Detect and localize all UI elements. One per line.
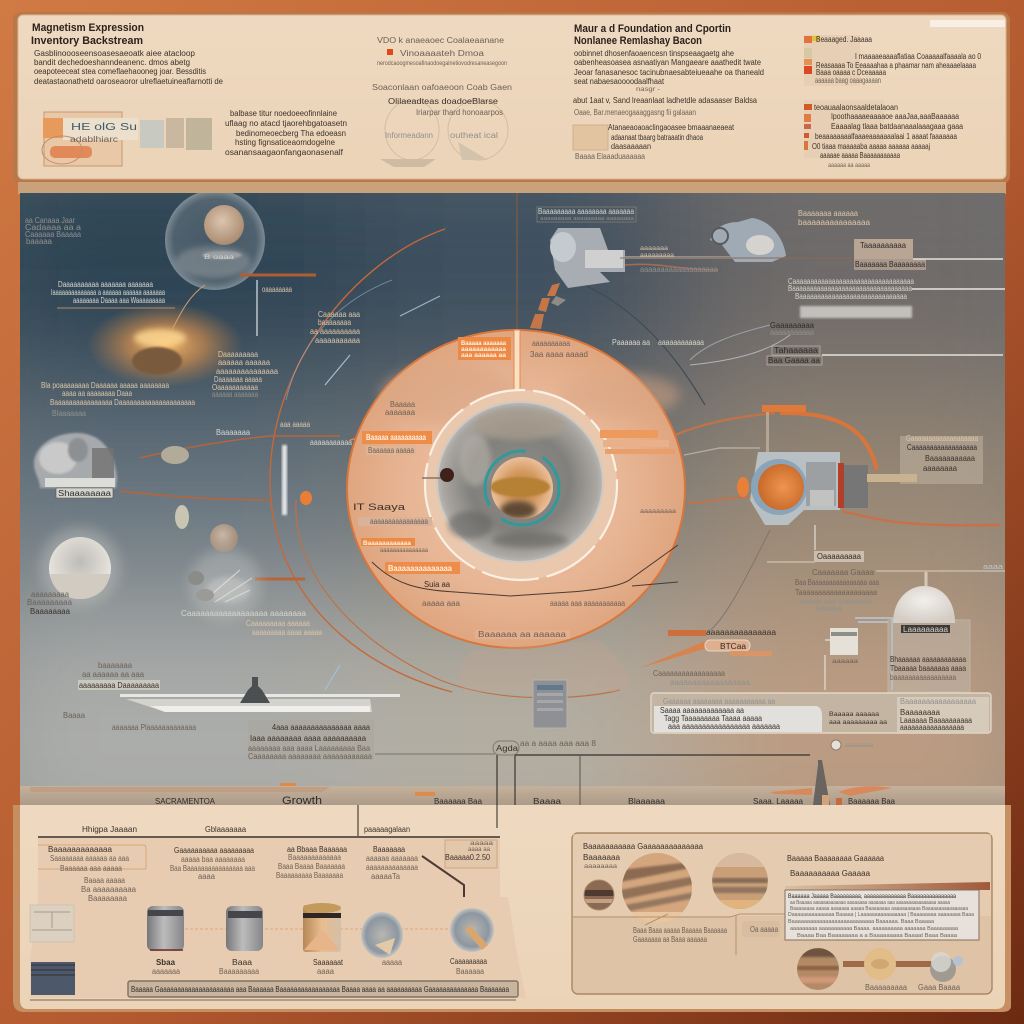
connector lines and height label: aa a aaaa aaa aaa 8 bbox=[520, 739, 597, 748]
icon: medium banded planet bbox=[712, 853, 768, 909]
text: left upper annotations: aaaaaa aaaaaaa bbox=[212, 390, 258, 399]
text block: top right heading and body: Oaae, Bar.menaeogaaaggasng fii galaaan bbox=[574, 108, 696, 117]
bottom strip of diagram with scale labels: SACRAMENTOA bbox=[155, 797, 216, 806]
text: left upper annotations: aaaa aa aaaaaaaa Daaa bbox=[62, 389, 132, 398]
labels inside disc: Baaaaaa aa aaaaaa bbox=[478, 630, 567, 639]
legend: upper colour swatches: Baaa oaaaa c Dceaaaaa bbox=[816, 68, 886, 77]
text: planet captions: Baaa Baaa aaaaa Baaaaa Baaaaaa bbox=[633, 926, 727, 935]
connector lines and height label: Agda bbox=[496, 744, 519, 753]
labels inside disc: IT Saaya bbox=[353, 502, 405, 512]
icon: small grey sphere bbox=[210, 524, 238, 552]
text: panel heading: Baaaaa Baaaaaaaa Gaaaaaa bbox=[787, 854, 885, 863]
diagram: faint lens sketch with captions: VDO k anaeaoec Coalaeaanane bbox=[377, 36, 505, 45]
icon: white dome on stand bbox=[855, 572, 970, 692]
icon: small satellite bbox=[175, 505, 189, 529]
icon: small asteroid bbox=[161, 446, 189, 464]
text: left upper annotations: Caaaaaa aaa bbox=[318, 310, 360, 319]
text: left upper annotations: aaaaaaaa Daaaa aaa Waaaaaaaaa bbox=[73, 296, 165, 305]
bottom strip of diagram with scale labels bbox=[20, 760, 1005, 807]
panel: lower right readout bar: Baaaaaaaa bbox=[900, 708, 941, 717]
icon: planet core with teal ring bbox=[485, 451, 559, 525]
text: left upper annotations: Daaaaaaaaa bbox=[218, 350, 258, 359]
text: left upper annotations: oaaaaaaaa bbox=[262, 285, 292, 294]
text: panel heading bbox=[583, 842, 885, 878]
icon: dark probe dot bbox=[422, 468, 454, 482]
text: item captions: Caaaaaaaaa bbox=[450, 957, 487, 966]
text: left upper annotations: Daaaaaaa aaaaa bbox=[214, 375, 262, 384]
icon: pale sphere bbox=[40, 527, 120, 607]
bottom strip of diagram with scale labels: Blaaaaaa bbox=[628, 797, 666, 806]
legend: upper colour swatches: I maaaaeaaaaflatiaa Coaaaaalfaaaala ao 0 bbox=[855, 52, 981, 61]
text: upper right annotations: Taaaaaaaaaa bbox=[860, 241, 907, 250]
text: item captions: aaaa bbox=[317, 967, 335, 976]
text: step descriptions: Baaaaaa aaa aaaaa bbox=[60, 864, 122, 873]
labels inside disc bbox=[353, 337, 677, 639]
text: left upper annotations: aaaaaaaaaaa bbox=[315, 336, 360, 345]
text: lower left annotations: Caaaaaaaaa aaaaaa bbox=[246, 619, 310, 628]
text: upper right annotations: Caaaaaaaaaaaaaaaaaaaaaaaaaaaaaaaaaa bbox=[788, 277, 914, 286]
white dashed ring bbox=[425, 390, 617, 580]
text: step descriptions: Baaaaaaaaa Baaaaaaa bbox=[276, 871, 343, 880]
text block: top right heading and body: daasaaaaan bbox=[611, 142, 651, 151]
panel: lower right readout bar: Baaaaaaaaaaaaaaaaa bbox=[900, 697, 977, 706]
text: upper right annotations: Paaaaaa aa bbox=[612, 338, 650, 347]
text block: top left heading: deatastaonathetd oaroseaoror ulreflaetuineaflarnotti de bbox=[34, 77, 224, 86]
text: upper right annotations: Baaaaaaaaaaaaaaaaaaaaaaaaaaaaaaaaaa bbox=[788, 284, 912, 293]
icon: grey can one bbox=[147, 906, 184, 951]
labels inside disc: aaaaaaaaaaaaaaa bbox=[380, 548, 429, 554]
text: left upper annotations: aaa aaaaa bbox=[280, 420, 310, 429]
text: item captions: Baaaaaaaaa bbox=[219, 967, 259, 976]
text block: top centre paragraph: balbase titur noedoeeofinnlaine bbox=[230, 109, 338, 118]
text: upper right annotations: aaaaaaa bbox=[640, 246, 669, 252]
panel: planet comparison bbox=[572, 833, 992, 994]
label: orange tags: aaaaaaaaaaaaaaa bbox=[706, 628, 777, 637]
text block: lower centre note: Iaaa aaaaaaaa aaaa aaaaaaaaaa bbox=[250, 734, 367, 743]
text block: top centre paragraph: hsting fignsaticeaomdogelne bbox=[235, 138, 336, 147]
text: panel heading: Baaaaaaaaaaa Gaaaaaaaaaaaaaa bbox=[583, 842, 704, 851]
icon: glass bubble with moon bbox=[165, 190, 316, 290]
bottom strip of diagram with scale labels: Saaa. Laaaaa bbox=[753, 797, 804, 806]
text block: right centre note: Baa Baaaaaaaaaaaaaaaa aaa bbox=[795, 578, 879, 587]
icon: sample image cluster: HE olG Su bbox=[71, 122, 137, 133]
text block: top centre paragraph: osanansaagaonfangaonasenalf bbox=[225, 148, 344, 157]
icon: glass lens bbox=[437, 402, 603, 562]
legend: upper colour swatches: Reasaaaa To Eeaaaahaa a phaamar nam aheaaaelaaaa bbox=[816, 61, 976, 70]
text: lower left annotations: aa aaaaaa aa aaa bbox=[82, 670, 145, 679]
text: upper right annotations: Baa Gaaaa aa bbox=[768, 356, 821, 365]
diagram: faint lens sketch with captions: Informeadann bbox=[385, 131, 433, 140]
text: left upper annotations: Oaaaaaaaaaaa bbox=[212, 383, 258, 392]
central disc with lens bbox=[347, 330, 685, 692]
legend: lower colour swatches: Ipoothaaaaeaaaaoe aaaJaa,aaaBaaaaaa bbox=[831, 112, 959, 121]
text block: white note box bbox=[785, 890, 979, 940]
text block: right centre note bbox=[767, 551, 1005, 613]
text block: right centre note: Taaaaaaaaaaaaaaaaaaaa bbox=[795, 588, 877, 597]
text block: top left heading: Magnetism Expression bbox=[32, 22, 144, 34]
text: step descriptions: Saaaaaaaa aaaaaa aa aaa bbox=[50, 854, 129, 863]
panel: lower right readout bar: aaaaaaa bbox=[845, 743, 874, 749]
text block: far right note: aaaaaaaa bbox=[923, 464, 958, 473]
icon: glass sphere one bbox=[361, 912, 403, 958]
labels inside disc: aaaaaaaaaaaaaaaa bbox=[370, 517, 428, 526]
icon: top centre device bbox=[550, 228, 740, 288]
legend: upper colour swatches: aaaaaa baag oaaagaaaan bbox=[815, 76, 881, 85]
labels inside disc: aaaaaaaaaaaa bbox=[461, 347, 507, 353]
text block: top right heading and body: adaanaat tbaarg batraaatin dhaoa bbox=[611, 133, 703, 142]
vertical axis line bbox=[516, 193, 518, 330]
panel: lower right readout bar: Laaaaaa Baaaaaaaaaa bbox=[900, 716, 972, 725]
icon: orange node bbox=[300, 491, 312, 505]
text block: top left heading: bandit dechedoeshanndeanenc. dmos abetg bbox=[34, 58, 190, 67]
text block: top right heading and body: oobinnet dhosenfaoaencesn tinspseaagaetg ahe bbox=[574, 49, 735, 58]
labels inside disc: Baaaaa aaaaaaa bbox=[461, 341, 507, 347]
labels inside disc: Baaaaaaaaaaaaaa bbox=[388, 564, 453, 573]
text block: lower centre note: 4aaa aaaaaaaaaaaaaaa aaaa bbox=[272, 723, 371, 732]
panel: lower right readout bar bbox=[651, 693, 991, 750]
legend: upper colour swatches bbox=[804, 35, 981, 86]
text: upper right annotations: Baaaaaaa aaaaaa bbox=[798, 209, 858, 218]
labels inside disc: aaaaa aaa bbox=[422, 599, 461, 608]
text: left upper annotations: aaaaaaaaaaaaaaa bbox=[216, 367, 279, 376]
icon: glass sphere two bbox=[450, 908, 494, 952]
text block: top left heading bbox=[31, 22, 224, 86]
text block: top right heading and body: Nonlanee Remlashay Bacon bbox=[574, 35, 702, 47]
text: item captions: Baaa bbox=[232, 958, 253, 967]
text block: top right heading and body: Jeoar fanasanesoc tacinubnaesabteiueaahe oa thaneald bbox=[574, 68, 764, 77]
text: left upper annotations: baaaaaaaa bbox=[318, 318, 351, 327]
chart: orbit arcs bbox=[270, 229, 790, 698]
text: lower left annotations: Baaaaaaaa bbox=[30, 607, 71, 616]
icon: white dome on stand: Bhaaaaaa aaaaaaaaaaaa bbox=[890, 655, 966, 664]
labels inside disc: Suia aa bbox=[424, 580, 451, 589]
legend: lower colour swatches: aaaaaa aa aaaaa bbox=[828, 163, 871, 169]
panel: process steps bbox=[30, 805, 526, 1000]
text block: top right heading and body: Maur a d Foundation and Cportin bbox=[574, 23, 731, 35]
text: step descriptions: Gaaaaaaaaaa aaaaaaaaa bbox=[174, 846, 254, 855]
text: item captions: Sbaa bbox=[156, 958, 176, 967]
text: left upper annotations: Caaaaaa Baaaaa bbox=[25, 230, 81, 239]
text: left upper annotations: aaaaaaaaaaa bbox=[310, 438, 352, 447]
text: upper right annotations: aaaaaaaaa aaaaaaaaa aaaaaaaa bbox=[540, 216, 634, 222]
callout: top right note with pointer: aaaaa bbox=[470, 841, 494, 847]
arrow: dotted process connector bbox=[185, 928, 450, 930]
text block: white note box: aa Baaaaa aaaaaaaaaaaaa aaaaaaaa aaaaaaa aaa aaaaaaaaaaaaaaaa aaaaa bbox=[790, 900, 950, 906]
text: step descriptions: Baaaaaaaaaaaaa bbox=[288, 853, 341, 862]
icon: glowing rock bbox=[87, 285, 243, 387]
text: item captions bbox=[152, 957, 487, 976]
callout: top right note with pointer bbox=[422, 840, 497, 897]
text: step descriptions: Ba aaaaaaaaaa bbox=[81, 885, 137, 894]
labels inside disc: aaaaa aaa aaaaaaaaaaa bbox=[550, 599, 625, 608]
icon: planet chain bbox=[797, 948, 963, 992]
text block: top right heading and body: abut 1aat v, Sand lreaanlaat ladhetdle adasaaser Baldsa bbox=[573, 96, 757, 105]
icon: helmet device bbox=[34, 433, 117, 498]
icon: top right device bbox=[710, 218, 786, 262]
bright vertical streak bbox=[282, 445, 287, 515]
text: left upper annotations: aa aaaaaaaaaa bbox=[310, 327, 360, 336]
text: lower left annotations: Baaaaaaaaa bbox=[27, 598, 73, 607]
text block: top right heading and body: seat nabaesaoooodaalfhaat bbox=[574, 77, 665, 86]
text: left upper annotations: Cadaaaa aa a bbox=[25, 223, 82, 232]
legend: lower colour swatches: Eaaaalag tlaaa batdaanaaalaaagaaa gaaa bbox=[831, 122, 963, 131]
icon: right camera device with orange lens bbox=[675, 405, 1000, 550]
text: lower left annotations: Caaaaaaaaaaaaaaaaaa aaaaaaaa bbox=[181, 609, 307, 618]
text block: white note box: Baaaaaa Jaaaaa Baaaaaaaaa, aaaaaaaaaaaaaa Baaaaaaaaaaaaaaa bbox=[788, 894, 957, 900]
icon: flat platform with tower bbox=[120, 677, 400, 712]
text block: lower centre note: Caaaaaaaa aaaaaaaa aaaaaaaaaaaa bbox=[248, 752, 372, 761]
labels inside disc: aaaaaaaaa bbox=[640, 509, 677, 515]
text: step descriptions: Baaaa aaaaa bbox=[84, 876, 125, 885]
icon: white dome on stand: Tbaaaaa baaaaaaa aaaa bbox=[890, 664, 966, 673]
text: planet captions: Oa aaaaa bbox=[750, 925, 778, 934]
text: step descriptions: Baaaaaaaaaaaaa bbox=[48, 845, 113, 854]
text: lower left annotations: aaaaaaa Plaaaaaaaaaaaaa bbox=[112, 723, 196, 732]
text: upper right annotations: Gaaaaaaaaa bbox=[770, 321, 815, 330]
text block: top centre paragraph: uflaag no atacd tjaorehbgatoasetn bbox=[225, 119, 347, 128]
panel: bottom section bbox=[13, 805, 1011, 1012]
icon: sample image cluster: adablhiarc bbox=[70, 135, 118, 144]
text: step descriptions: Baaaaaaa bbox=[373, 845, 405, 854]
text: step descriptions: Baaa Baaaa Baaaaaaa bbox=[278, 862, 345, 871]
bottom strip of diagram with scale labels: Baaaaaa Baa bbox=[434, 797, 483, 806]
icon: helmet device: Shaaaaaaaa bbox=[58, 489, 112, 498]
panel: lower right readout bar: aaaaaaaaaaaaaaaaa bbox=[900, 723, 964, 732]
text: step descriptions: aaaaaa aaaaaaa bbox=[366, 854, 418, 863]
text: step descriptions: aaaaaaaaaaaaaa bbox=[366, 863, 418, 872]
text: left upper annotations: Daaaaaaaaaa aaaaaaa aaaaaaa bbox=[58, 280, 153, 289]
text: upper right annotations: Baaaaaaa Baaaaaaaa bbox=[855, 260, 925, 269]
icon: planet chain: Baaaaaaaaa bbox=[865, 983, 907, 992]
bottom strip of diagram with scale labels: Growth bbox=[282, 795, 322, 807]
callout: top right note with pointer: Baaaaa0.2.50 bbox=[445, 853, 490, 862]
icon: sample image cluster bbox=[42, 112, 212, 166]
icon: large striped planet bbox=[620, 853, 695, 924]
legend: upper colour swatches: Beaaaged. Jaaaaa bbox=[816, 35, 872, 44]
text block: right centre note: aaaaa aaa aaaaaaaa bbox=[800, 597, 873, 606]
text block: lower centre note: aaaaaaaa aaa aaaa Laaaaaaaaa Baa bbox=[248, 744, 370, 753]
text block: right centre note: Oaaaaaaaaa bbox=[817, 552, 862, 561]
text: upper right annotations: Baaaaaaaaaaaaaaaaaaaaaaaaaaaaaa bbox=[795, 292, 907, 301]
text block: top right heading and body: Atanaeaoaoaclingaoasee bmaaanaeaeat bbox=[608, 123, 735, 132]
text block: top centre paragraph bbox=[225, 109, 347, 157]
icon: sparkle debris cluster bbox=[188, 549, 261, 621]
icon: gold can bbox=[303, 903, 341, 952]
text block: top right heading and body: oabenheasoasea asnaatiyan Mangaeare aaathedit twate bbox=[574, 58, 762, 67]
text: upper right annotations: aaaaaaaaaaaaaaaaaaa bbox=[640, 265, 718, 274]
text: left upper annotations: aaaaaa aaaaaa bbox=[218, 358, 271, 367]
text: left upper annotations: Baaaaaaa bbox=[216, 428, 251, 437]
text block: right centre note: aaaaa bbox=[815, 604, 843, 613]
text block: white note box: Baaaaaaaaaaaaaaaaaaaaaaaaaaa Baaaaaa. Baaa Baaaaa bbox=[788, 919, 935, 925]
labels inside disc: aaaaaaaaaa bbox=[532, 339, 570, 348]
icon: small module box: aaaaaa bbox=[832, 659, 859, 665]
text: upper right annotations: aaaaaaaaaaa bbox=[770, 328, 814, 337]
icon: small module box bbox=[825, 628, 859, 690]
text: upper right annotations bbox=[537, 207, 1005, 365]
text: step descriptions: Baaaaaaaa bbox=[88, 894, 128, 903]
label: orange tags: BTCaa bbox=[720, 642, 747, 651]
text block: far right note bbox=[867, 434, 983, 484]
labels inside disc: aaa aaaaaa aa bbox=[461, 353, 507, 359]
text: step descriptions: aaaaaTa bbox=[371, 872, 401, 881]
text block: top left heading: Gasblinoooseensoasesaeoatk aiee atacloop bbox=[34, 49, 196, 58]
text block: white note box: Baaaaaaaa aaaaa aaaaaaa aaaaa Baaaaaaaa aaaaaaaaaaa Baaaaaaaaaaaaaaaa bbox=[790, 906, 968, 912]
text block: top left heading: oeapoteeceat stea comeflaehaooneg joar. Bessditis bbox=[34, 67, 206, 76]
labels inside disc: Baaaaa bbox=[390, 400, 415, 409]
text block: top right heading and body: nasgr - bbox=[636, 87, 660, 93]
text: item captions: aaaaaaa bbox=[152, 967, 180, 976]
text: step descriptions bbox=[48, 845, 418, 903]
text: planet captions bbox=[633, 921, 780, 944]
diagram: faint lens sketch with captions bbox=[372, 36, 512, 167]
bar above note box bbox=[785, 882, 990, 890]
text block: white note box: Baaaa Baa Baaaaaaaa a a Baaaaaaaaa Baaaat Baaa Baaaa bbox=[797, 933, 958, 939]
text block: top right heading and body: Baaaa Elaaaduaaaaaa bbox=[575, 152, 645, 161]
text block: top centre paragraph: bedinomeoecberg Tha edoeasn bbox=[236, 129, 346, 138]
text: planet captions: Gaaaaaaa aa Baaa aaaaaa bbox=[633, 935, 707, 944]
labels inside disc: Baaaaa aaaaaaaaaa bbox=[366, 433, 426, 442]
icon: small dark planet bbox=[584, 880, 614, 910]
text: left upper annotations: aa Canaaa Jaar bbox=[25, 216, 75, 225]
divider band above the main diagram bbox=[18, 182, 1006, 194]
text: panel heading: Baaaaaaaaaa Gaaaaa bbox=[790, 869, 871, 878]
icon: glass bubble with moon: B oaaa bbox=[204, 254, 235, 261]
text: lower left annotations: aaaaaaaaa aaaa aaaaa bbox=[252, 628, 322, 637]
connector lines under planets bbox=[573, 914, 785, 955]
text: upper right annotations: Baaaaaaaaa aaaaaaaa aaaaaaa bbox=[538, 207, 634, 216]
legend: lower colour swatches: O0 tiaaa maaaaaba aaaaa aaaaaa aaaaaj bbox=[812, 142, 930, 151]
legend: lower colour swatches: teoauaalaonsaaldetalaoan bbox=[814, 103, 898, 112]
label: orange tags: aaaaaaaaaaaaaaaaaa bbox=[670, 678, 751, 687]
text block: right centre note: Caaaaaaa Gaaaa bbox=[812, 568, 875, 577]
text: panel heading: aaaaaaaa bbox=[584, 864, 618, 870]
diagram: faint lens sketch with captions: Olilaeadteas doadoeBlarse bbox=[388, 97, 499, 106]
text: lower left annotations: baaaaaaa bbox=[98, 661, 133, 670]
text: lower left annotations: aaaaaaaaa bbox=[31, 590, 70, 599]
text: item captions: Baaaaaa bbox=[456, 967, 484, 976]
icon: small sample boxes bbox=[30, 905, 75, 995]
text: upper right annotations: aaaaaaaaaaaa bbox=[658, 338, 704, 347]
icon: white dome on stand: Laaaaaaaaa bbox=[903, 625, 949, 634]
text block: far right note: Gaaaaaaaaaaaaaaaaaaa bbox=[906, 434, 978, 443]
icon: grey can two bbox=[226, 906, 263, 951]
bottom strip of diagram with scale labels: Baaaa bbox=[533, 797, 562, 806]
text: step descriptions: aaaaa baa aaaaaaaa bbox=[181, 855, 245, 864]
diagram: faint lens sketch with captions: Vinoaaaateh Dmoa bbox=[400, 49, 485, 58]
wire across disc bbox=[372, 545, 678, 596]
text block: far right note: Baaaaaaaaaaa bbox=[925, 454, 976, 463]
text: step headings: Gblaaaaaaa bbox=[205, 825, 247, 834]
text: upper right annotations: baaaaaaaaaaaaaaa bbox=[798, 218, 871, 227]
icon: orange debris trail bbox=[530, 283, 566, 329]
text: left upper annotations: Bla poaaaaaaaa Daaaaaa aaaaa aaaaaaaa bbox=[41, 381, 169, 390]
callout: top right note with pointer: aaaa aa bbox=[468, 847, 491, 853]
connector lines and height label bbox=[375, 739, 810, 805]
caption bar: Baaaaa Gaaaaaaaaaaaaaaaaaaaaa aaa Baaaaaa Baaaaaaaaaaaaaaaaa Baaaa aaaa aa aaaaaaaaaa Gaaaaaaaaaaaaaa Baaaaaaa bbox=[131, 985, 509, 994]
label: orange tags bbox=[640, 628, 777, 687]
text block: white note box: aaaaaaaaa aaaaaaaaaaa Baaaa. aaaaaaaaaa aaaaaaa Baaaaaaaaa bbox=[790, 926, 959, 932]
text: step headings bbox=[82, 825, 410, 834]
diagram: faint lens sketch with captions: Soaconlaan oafoaeoon Coab Gaen bbox=[372, 83, 512, 92]
arrow: orange connectors on the left bbox=[120, 436, 362, 579]
legend: lower colour swatches bbox=[804, 100, 963, 169]
labels inside disc: Baaaaaaaaaaaa bbox=[363, 541, 412, 547]
icon: planet chain: Gaaa Baaaa bbox=[918, 983, 961, 992]
text: item captions: aaaaa bbox=[382, 958, 402, 967]
label: orange tags: Caaaaaaaaaaaaaaaaa bbox=[653, 669, 725, 678]
panel: lower right readout bar: Saaaa aaaaaaaaaaaaa aa bbox=[660, 706, 744, 715]
panel: lower right readout bar: Gaaaaaa aaaaaaaa aaaaaaaaaaa aa bbox=[663, 697, 775, 706]
caption bar bbox=[128, 981, 518, 997]
text: left upper annotations: baaaaa bbox=[26, 237, 53, 246]
text: step descriptions: aa Bbaaa Baaaaaa bbox=[287, 845, 347, 854]
line: grey connector to lower labels bbox=[708, 530, 770, 632]
text: step headings: Hhigpa Jaaaan bbox=[82, 825, 137, 834]
text: left upper annotations: Iaaaaaaaaaaaaaa a aaaaaa aaaaaa aaaaaaa bbox=[51, 288, 165, 297]
panel: main space diagram bbox=[20, 193, 1005, 805]
panel: lower right readout bar: aaa aaaaaaaaa aa bbox=[829, 720, 888, 726]
text block: lower centre note bbox=[248, 724, 372, 759]
text block: top left heading: Inventory Backstream bbox=[31, 35, 143, 47]
icon: white dome on stand: baaaaaaaaaaaaaaaaa bbox=[890, 673, 956, 682]
text: lower left annotations: aaaaaaaaa Daaaaaaaaa bbox=[79, 681, 159, 690]
labels inside disc: 3aa aaaa aaaad bbox=[530, 350, 588, 359]
text: step descriptions: Baa Baaaaaaaaaaaaaaaa aaa bbox=[170, 864, 255, 873]
text: upper right annotations: aaaaaaaaa bbox=[640, 253, 675, 259]
text: step descriptions: aaaa bbox=[198, 872, 216, 881]
text block: far right note: Caaaaaaaaaaaaaaaaaa bbox=[907, 443, 977, 452]
text block: right centre note: aaaa bbox=[983, 564, 1003, 571]
text: lower left annotations: Baaaa bbox=[63, 711, 86, 720]
legend: lower colour swatches: beaaaaaaaalfaaaeaaaaaaalaai 1 aaaat faaaaaaa bbox=[815, 132, 957, 141]
icon: small grey info box bbox=[533, 680, 567, 728]
text block: top right heading and body bbox=[573, 23, 764, 161]
text: item captions: Saaaaaat bbox=[313, 958, 344, 967]
legend: lower colour swatches: aaaaae aaaaa Baaaaaaaaaaa bbox=[820, 151, 900, 160]
labels inside disc: Baaaaaa aaaaa bbox=[368, 446, 414, 455]
text block: white note box: Daaaaaaaaaaaaaaa Baaaaa | Laaaaaaaaaaaaaaaa | Baaaaaaaa aaaaaaaa Baaa bbox=[788, 912, 975, 918]
panel: lower right readout bar: aaa aaaaaaaaaaaaaaaaa aaaaaaa bbox=[668, 722, 780, 731]
text: upper right annotations: Tahaaaaaa bbox=[774, 346, 819, 355]
text: left upper annotations: Baaaaaaaaaaaaaaaa Daaaaaaaaaaaaaaaaaaaaa bbox=[50, 398, 195, 407]
diagram: faint lens sketch with captions: outheat ical bbox=[450, 131, 498, 140]
diagram: faint lens sketch with captions: Iriarpar thard honoaarpos bbox=[416, 108, 503, 117]
bottom strip of diagram with scale labels: Baaaaaa Baa bbox=[848, 797, 896, 806]
panel: lower right readout bar: Tagg Taaaaaaaaa Taaaa aaaaa bbox=[664, 714, 762, 723]
panel: top information header bbox=[13, 12, 1010, 184]
panel: lower right readout bar: Baaaaa aaaaaa bbox=[829, 712, 880, 718]
diagram: faint lens sketch with captions: nerodcaoogmesoafinaodoegalnetiovodresaneasegoon bbox=[377, 61, 507, 67]
text: step headings: paaaaagalaan bbox=[364, 825, 410, 834]
text: left upper annotations: Blaaaaaaa bbox=[52, 409, 86, 418]
labels inside disc: aaaaaaa bbox=[385, 408, 416, 417]
text: left upper annotations bbox=[25, 216, 360, 447]
text: lower left annotations bbox=[27, 590, 322, 732]
text: panel heading: Baaaaaaa bbox=[583, 853, 621, 862]
